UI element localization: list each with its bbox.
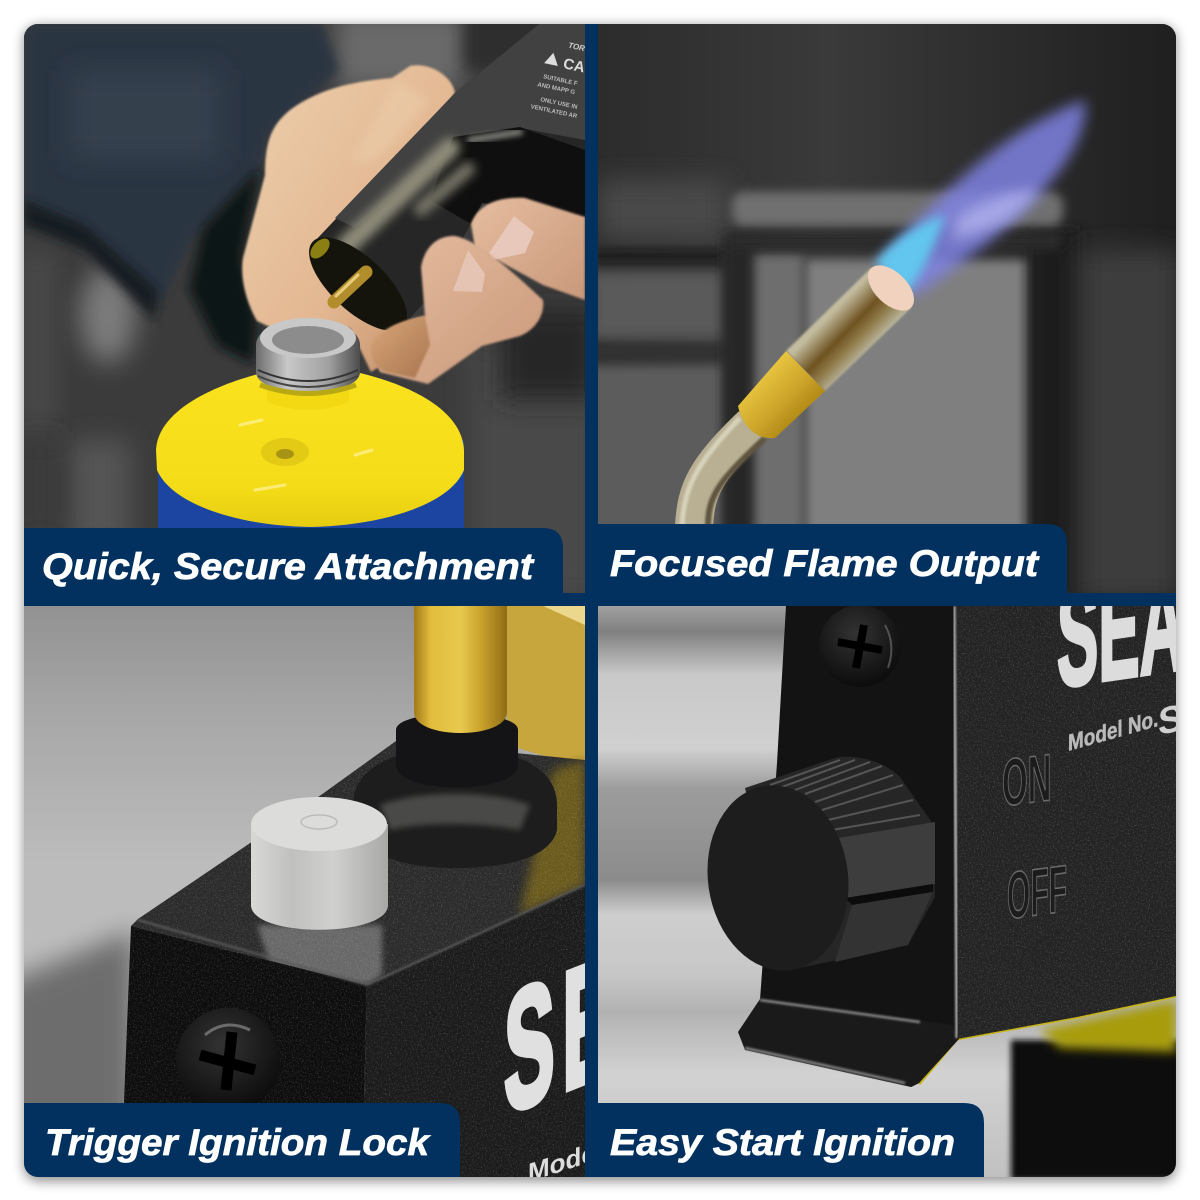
label: easy start ignition [585,1103,984,1177]
right black face [911,606,1176,1087]
body right face [362,885,585,1177]
label: quick secure attachment [24,528,563,606]
jacket cuff [189,167,260,364]
thumb [371,316,430,378]
torch label text: CA [562,55,587,76]
black torch body [131,741,585,985]
aluminium button [251,824,388,930]
edge highlight [954,606,957,1038]
brass pin [334,272,366,302]
torch label text [531,42,585,118]
label: quick secure attachment: Quick, Secure Attachment [42,546,535,587]
collar inner ring [396,714,518,788]
bottle neck [267,390,349,410]
panel: easy start ignition photo: OFF [1007,851,1067,933]
screw [176,1008,280,1112]
foot flange [738,999,959,1087]
panel: quick secure attachment photo [20,10,600,600]
torch label text: ONLY USE IN [540,97,578,111]
torch nozzle opening [309,238,407,330]
copper tip end [868,265,914,311]
bent tube [694,425,752,526]
torch label text: SUITABLE F [543,74,578,87]
label: trigger ignition lock [24,1103,460,1177]
body left face [124,926,367,1103]
panel: focused flame output photo [590,24,1180,600]
brass tip [786,268,911,391]
panel: easy start ignition photo: S [1158,696,1183,744]
body texture [950,606,1176,1046]
printed brand text: SEA [1057,542,1184,718]
label: focused flame output: Focused Flame Output [610,543,1040,584]
fingers [471,198,585,300]
panel: trigger ignition lock photo: Mode [528,1137,596,1188]
panel: easy start ignition photo: Model No. [1068,705,1158,756]
gold collar [738,351,825,438]
gas bottle blue body [158,440,464,528]
brass block [507,606,585,768]
label: focused flame output [585,524,1067,606]
panel: trigger ignition lock photo [24,606,585,1177]
gas bottle yellow dome [156,373,464,527]
label: easy start ignition: Easy Start Ignition [610,1122,955,1163]
jacket sleeve [24,24,339,303]
yellow bottle edge [1040,1000,1176,1052]
embossed ON OFF: ON [1002,741,1051,821]
printed brand: SE [504,915,621,1150]
torch handle [317,84,585,320]
screw [819,605,901,687]
flame [880,100,1085,296]
hand [242,65,455,372]
dividers [585,24,598,1177]
knob [696,757,935,980]
rubber collar [353,748,557,868]
panel: easy start ignition photo [598,606,1176,1177]
torch label text: VENTILATED AR [530,104,578,120]
left black face [760,606,957,1087]
dark object lower right [1011,1040,1181,1180]
torch label text: AND MAPP G [537,82,576,96]
brass tube [414,606,507,733]
label: trigger ignition lock: Trigger Ignition Lock [45,1122,432,1163]
body texture [120,740,585,1177]
torch label text: TOR [567,41,586,53]
